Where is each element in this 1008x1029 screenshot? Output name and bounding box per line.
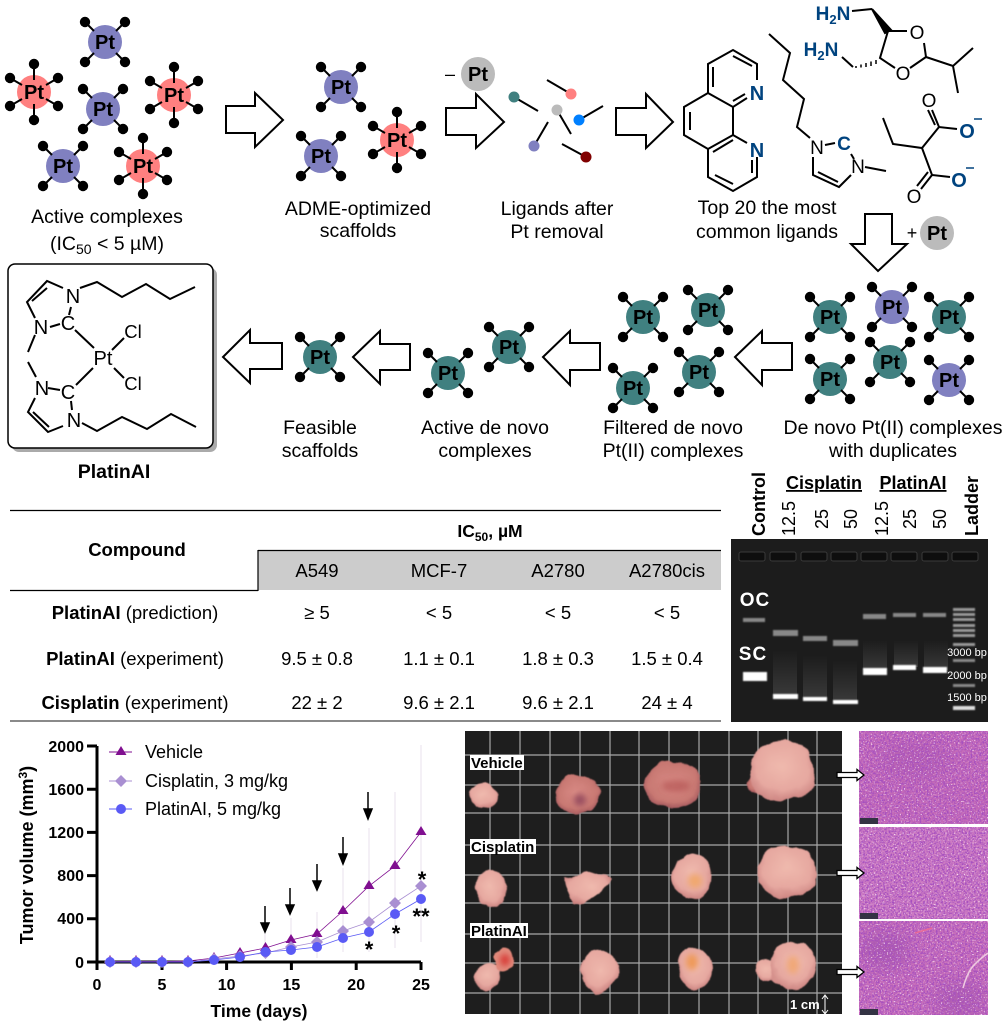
table header cells: A2780: [531, 560, 585, 581]
label: de novo with duplicates: with duplicates: [828, 440, 957, 462]
label: ADME-optimized scaffolds: scaffolds: [320, 220, 397, 242]
row: PlatinAI experiment: 1.8 ± 0.3: [522, 648, 594, 669]
series: vehicle: [104, 826, 426, 964]
label: active complexes: < 5 µM): [92, 233, 164, 255]
molecule: dioxolane diamine: H: [816, 4, 829, 25]
molecule: PlatinAI: [27, 281, 196, 432]
molecule: dioxolane diamine: 2: [817, 48, 825, 63]
row: PlatinAI experiment: [46, 648, 703, 669]
label: ligands after Pt removal: Ligands after: [501, 198, 614, 220]
axis tick labels: 5: [158, 977, 167, 994]
gel image: OC: [740, 590, 770, 611]
complex: teal Pt: Pt: [939, 307, 959, 329]
molecule: PlatinAI: Pt: [94, 348, 113, 370]
label: top 20 ligands: common ligands: [696, 221, 838, 243]
gel lane labels: 12.5: [779, 501, 799, 536]
complex: teal Pt: [805, 354, 855, 404]
group: ADME scaffolds: [296, 62, 426, 181]
axis tick labels: 1600: [48, 782, 84, 799]
arrow: left 3: [353, 331, 410, 384]
molecule: ethylmalonate: O: [907, 187, 921, 208]
axis titles: [16, 766, 307, 1021]
molecule: PlatinAI: Cl: [124, 373, 142, 394]
molecule: dioxolane diamine: N: [837, 4, 850, 25]
molecule: PlatinAI: N: [34, 317, 48, 339]
dose arrows: [261, 792, 372, 932]
complex: teal Pt: Pt: [698, 300, 718, 322]
axis tick labels: 0: [75, 955, 84, 972]
significance stars: *: [418, 867, 427, 892]
axis tick labels: 400: [57, 911, 84, 928]
photo labels: [470, 755, 536, 940]
axis tick labels: 15: [283, 977, 300, 994]
histology panels: [859, 731, 988, 1020]
complex: teal Pt: Pt: [880, 352, 900, 374]
gel lane labels: 25: [812, 509, 832, 529]
molecule: dioxolane diamine: O: [896, 64, 910, 85]
row: PlatinAI experiment: 1.5 ± 0.4: [631, 648, 703, 669]
photo labels: Cisplatin: [471, 839, 534, 856]
gel image: 1500 bp: [947, 692, 987, 704]
group: active de novo complexes: [423, 322, 534, 398]
axis titles: ): [17, 766, 37, 772]
row: PlatinAI prediction: < 5: [654, 602, 680, 623]
axis tick labels: 800: [57, 868, 84, 885]
molecule: dioxolane diamine: N: [825, 40, 838, 61]
row: PlatinAI prediction: ≥ 5: [304, 602, 330, 623]
complex: blue Pt: [38, 141, 88, 191]
series: PlatinAI: [105, 894, 426, 967]
axis tick labels: 10: [218, 977, 236, 994]
complex: red Pt: [145, 62, 203, 128]
legend: [109, 742, 288, 819]
molecule: PlatinAI: N: [67, 410, 81, 432]
plus Pt: [907, 216, 954, 250]
significance stars: *: [392, 921, 401, 946]
label: de novo with duplicates: De novo Pt(II) complexes: [784, 417, 1003, 439]
complex: red Pt: Pt: [164, 85, 184, 107]
molecule: ethylmalonate: O: [922, 91, 936, 112]
label: active complexes: Active complexes: [31, 206, 183, 228]
complex: blue Pt: Pt: [93, 99, 113, 121]
line chart: tumor volume: [16, 739, 430, 1021]
axis titles: Time (days): [211, 1001, 307, 1021]
arrows: to histology: [837, 770, 864, 978]
row: cisplatin experiment: [41, 692, 693, 713]
gel image: [731, 539, 988, 722]
molecule: PlatinAI: N: [66, 286, 80, 308]
complex: red Pt: Pt: [133, 156, 153, 178]
minus Pt: Pt: [468, 64, 488, 86]
arrow: right 2: [446, 94, 504, 148]
histology: vehicle: [859, 731, 988, 824]
axis titles: 3: [16, 772, 30, 778]
complex: feasible scaffold: Pt: [310, 347, 330, 369]
row: PlatinAI experiment: PlatinAI (experiment): [46, 648, 224, 669]
table heading: compound: Compound: [88, 539, 186, 560]
group: active complexes: [5, 17, 203, 199]
label: ADME-optimized scaffolds: ADME-optimized: [285, 198, 431, 220]
icon: ligands after Pt removal: [508, 80, 603, 162]
scale bar: 1 cm: [790, 995, 828, 1014]
arrow: down: [851, 214, 907, 271]
row: PlatinAI experiment: 1.1 ± 0.1: [403, 648, 475, 669]
complex: blue Pt: Pt: [53, 156, 73, 178]
axis tick labels: 25: [412, 977, 430, 994]
panel: PlatinAI structure box: [8, 264, 217, 452]
table: IC50 values: [10, 510, 721, 721]
legend: PlatinAI, 5 mg/kg: [145, 799, 281, 819]
molecule: phenanthroline: [684, 50, 764, 191]
photo labels: Vehicle: [471, 755, 523, 772]
molecule: pentyl imidazole carbene: N: [810, 138, 824, 159]
group: filtered complexes: [608, 285, 733, 413]
row: PlatinAI prediction: [52, 602, 680, 623]
complex: teal Pt: Pt: [623, 378, 643, 400]
plus Pt: +: [907, 223, 917, 243]
molecule: pentyl imidazole carbene: N: [851, 157, 865, 178]
axis titles: Tumor volume (mm: [17, 778, 37, 944]
table header cells: MCF-7: [411, 560, 467, 581]
axis tick labels: 20: [347, 977, 365, 994]
row: PlatinAI prediction: < 5: [545, 602, 571, 623]
complex: red Pt: [114, 133, 172, 199]
panel: workflow top row: [5, 4, 982, 271]
complex: teal Pt: Pt: [820, 307, 840, 329]
gel lane labels: 50: [930, 509, 950, 529]
row: cisplatin experiment: Cisplatin (experiment): [41, 692, 229, 713]
error bars: [265, 745, 421, 958]
minus Pt: –: [445, 64, 455, 84]
axes: [87, 746, 421, 970]
molecule: ethylmalonate: O: [951, 170, 967, 192]
molecule: PlatinAI: C: [61, 382, 75, 404]
label: feasible scaffolds: Feasible: [283, 417, 357, 439]
complex: blue Pt: Pt: [311, 146, 331, 168]
label: active de novo: complexes: [438, 440, 532, 462]
gel lane labels: 50: [841, 509, 861, 529]
molecule: phenanthroline: N: [750, 83, 764, 105]
molecule: phenanthroline: N: [750, 140, 764, 162]
gel lane labels: 25: [900, 509, 920, 529]
gel image: SC: [739, 644, 767, 665]
complex: purple Pt: Pt: [939, 370, 959, 392]
complex: teal Pt: Pt: [689, 362, 709, 384]
table header cells: A2780cis: [629, 560, 705, 581]
label: filtered de novo: Filtered de novo: [603, 417, 743, 439]
tumors: cisplatin row: [469, 846, 817, 913]
label: filtered de novo: Pt(II) complexes: [603, 440, 744, 462]
legend: Vehicle: [145, 742, 203, 762]
gel lane labels: 12.5: [872, 501, 892, 536]
axis tick labels: 1200: [48, 825, 84, 842]
complex: blue Pt: Pt: [331, 77, 351, 99]
table header cells: [295, 560, 705, 581]
significance stars: [365, 867, 430, 962]
arrow: right 3: [616, 94, 673, 148]
group: de novo complexes with duplicates: [805, 282, 974, 405]
complex: teal Pt: Pt: [820, 369, 840, 391]
complex: teal Pt: Pt: [438, 363, 458, 385]
tumors: vehicle row: [470, 741, 815, 813]
complex: teal Pt: [805, 292, 855, 342]
tumors: PlatinAI row: [473, 942, 817, 995]
photo: excised tumors on grid: [465, 731, 842, 1014]
gel image: 2000 bp: [947, 670, 987, 682]
significance stars: *: [365, 937, 374, 962]
row: PlatinAI prediction: PlatinAI (prediction): [52, 602, 218, 623]
molecule: ethylmalonate: O: [959, 121, 975, 143]
molecule: PlatinAI: Cl: [124, 321, 142, 342]
row: cisplatin experiment: 9.6 ± 2.1: [522, 692, 594, 713]
gel lane labels: Ladder: [962, 476, 982, 536]
arrow: left 4: [223, 330, 282, 383]
series: cisplatin: [104, 880, 427, 968]
table heading: IC50: IC: [457, 521, 475, 541]
molecule: dioxolane diamine: O: [910, 23, 924, 44]
panel: workflow middle row: [223, 282, 1003, 462]
gel lane labels: PlatinAI: [879, 473, 947, 493]
axis tick labels: 2000: [48, 739, 84, 756]
row: PlatinAI experiment: 9.5 ± 0.8: [281, 648, 353, 669]
molecule: PlatinAI: N: [35, 378, 49, 400]
gel lane labels: [749, 472, 982, 536]
gel lane labels: Cisplatin: [786, 473, 862, 493]
plus Pt: Pt: [927, 223, 947, 245]
axis tick labels: [48, 739, 430, 994]
molecule: pentyl imidazole carbene: C: [837, 134, 851, 155]
label: active complexes: (IC: [50, 233, 164, 257]
complex: blue Pt: [80, 17, 130, 67]
gel electrophoresis panel: [731, 472, 988, 722]
table heading: IC50: , µM: [488, 521, 523, 541]
arrow: left 2: [543, 331, 600, 385]
complex: teal Pt: Pt: [633, 307, 653, 329]
label: active de novo: Active de novo: [421, 417, 549, 439]
histology: PlatinAI: [859, 921, 988, 1020]
molecule: dioxolane diamine: H: [804, 40, 817, 61]
complex: red Pt: Pt: [24, 82, 44, 104]
molecule: dioxolane diamine: 2: [829, 12, 837, 27]
complex: purple Pt: Pt: [882, 297, 902, 319]
scale bar: 1 cm: 1 cm: [790, 997, 820, 1012]
molecule: ethylmalonate: [883, 91, 982, 208]
complex: red Pt: [5, 59, 63, 125]
molecule: pentyl imidazole carbene: [769, 34, 886, 187]
complex: purple Pt: [924, 355, 974, 405]
complex: feasible scaffold: [295, 332, 345, 382]
label: feasible scaffolds: scaffolds: [282, 440, 359, 462]
label: PlatinAI: PlatinAI: [78, 461, 150, 483]
complex: purple Pt: [867, 282, 917, 332]
complex: blue Pt: Pt: [95, 32, 115, 54]
axis tick labels: 0: [93, 977, 102, 994]
complex: teal Pt: Pt: [499, 337, 519, 359]
gel lane labels: Control: [749, 472, 769, 536]
complex: teal Pt: [865, 337, 915, 387]
arrow: left 1: [735, 331, 792, 385]
molecule: dioxolane diamine: [804, 4, 973, 93]
minus Pt: [445, 57, 495, 91]
arrow: right 1: [226, 93, 283, 147]
label: ligands after Pt removal: Pt removal: [510, 221, 604, 243]
label: top 20 ligands: Top 20 the most: [698, 197, 837, 219]
complex: teal Pt: [924, 292, 974, 342]
histology: cisplatin: [859, 827, 988, 919]
photo labels: PlatinAI: [471, 923, 527, 940]
row: cisplatin experiment: 24 ± 4: [641, 692, 693, 713]
gel image: 3000 bp: [947, 647, 987, 659]
row: PlatinAI prediction: < 5: [426, 602, 452, 623]
table header cells: A549: [295, 560, 339, 581]
complex: red Pt: Pt: [387, 130, 407, 152]
legend: Cisplatin, 3 mg/kg: [145, 771, 288, 791]
tumor colour accents: [500, 780, 799, 974]
row: cisplatin experiment: 22 ± 2: [291, 692, 343, 713]
row: cisplatin experiment: 9.6 ± 2.1: [403, 692, 475, 713]
label: active complexes: 50: [76, 241, 92, 257]
table heading: IC50: 50: [475, 530, 489, 544]
significance stars: **: [412, 904, 430, 929]
complex: blue Pt: [78, 84, 128, 134]
molecule: PlatinAI: C: [61, 313, 75, 335]
